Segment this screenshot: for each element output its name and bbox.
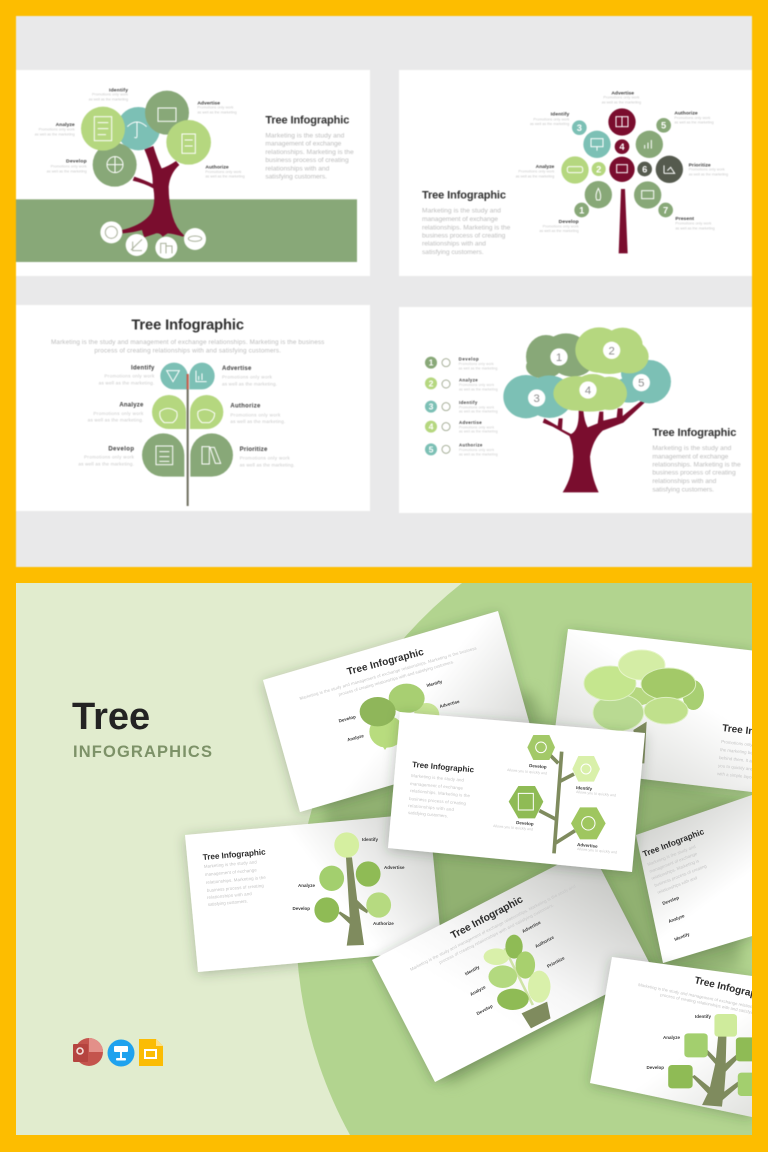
cloud 2 bbox=[575, 327, 649, 374]
mock slide: top centre: Develop bbox=[338, 714, 356, 723]
numbered small circles: 4 bbox=[619, 142, 625, 152]
labels: as well as the marketing. bbox=[230, 419, 285, 424]
labels: Promotions only work bbox=[104, 374, 155, 379]
labels: Promotions only work bbox=[205, 170, 242, 174]
labels: Analyze bbox=[536, 164, 555, 170]
numbered list: Identify bbox=[459, 400, 478, 405]
icon: PowerPoint bbox=[73, 1038, 103, 1066]
labels: Advertise bbox=[611, 90, 634, 96]
labels: as well as the marketing. bbox=[99, 380, 154, 385]
heading: Tree Infographic bbox=[131, 317, 244, 333]
numbered list: Promotions only work bbox=[459, 448, 494, 452]
darker shading under slides bbox=[320, 690, 740, 1085]
labels: Analyze bbox=[56, 122, 75, 128]
stem bbox=[187, 374, 189, 506]
labels: Develop bbox=[66, 159, 87, 165]
numbered list: Authorize bbox=[459, 443, 483, 448]
labels: as well as the marketing bbox=[675, 226, 715, 230]
labels: Prioritize bbox=[689, 163, 711, 169]
numbered list: Promotions only work bbox=[459, 362, 494, 366]
labels: Promotions only work bbox=[543, 224, 579, 228]
tree trunk and roots bbox=[122, 146, 184, 237]
description: satisfying customers. bbox=[265, 174, 327, 181]
mock slide: right bbox=[636, 795, 752, 963]
description bbox=[652, 445, 741, 493]
description: management of exchange bbox=[265, 141, 342, 148]
heading: Tree Infographic bbox=[652, 427, 736, 439]
slide: numbered circle tree bbox=[399, 70, 752, 276]
numbered small circles: 3 bbox=[577, 123, 582, 133]
numbered small circles: 7 bbox=[663, 205, 668, 215]
description: satisfying customers. bbox=[652, 486, 714, 493]
numbered list: Promotions only work bbox=[459, 405, 494, 409]
mock slide: centre hexagon tree: Develop bbox=[529, 763, 547, 770]
description bbox=[51, 339, 324, 354]
labels: Promotions only work bbox=[230, 412, 281, 417]
mock slide: left tree: relationships with and bbox=[207, 891, 252, 900]
mock slide: centre hexagon tree bbox=[388, 712, 645, 872]
description: process of creating relationships with and satisfying customers. bbox=[94, 347, 281, 354]
mock slide: left tree: management of exchange bbox=[205, 867, 257, 877]
tree crown circles bbox=[81, 91, 211, 187]
mock slide: centre hexagon tree: Marketing is the study and bbox=[411, 773, 465, 783]
labels: Promotions only work bbox=[92, 92, 128, 96]
slide: cloud tree bbox=[399, 307, 752, 513]
heading: Tree Infographic bbox=[422, 190, 506, 202]
mock slide: top right bbox=[550, 629, 768, 792]
labels: Promotions only work bbox=[533, 117, 570, 121]
panel: product cover bbox=[16, 583, 768, 1135]
mock slide: bottom right: Develop bbox=[646, 1065, 664, 1070]
labels: as well as the marketing bbox=[530, 122, 569, 126]
numbered badges: 5 bbox=[638, 378, 644, 390]
labels: Promotions only work bbox=[518, 170, 555, 174]
mock slide: centre hexagon tree: Tree Infographic bbox=[412, 760, 475, 774]
mock slide: left tree: Identify bbox=[362, 837, 378, 842]
description: management of exchange bbox=[652, 453, 729, 460]
mock slide: right: Identify bbox=[674, 931, 691, 942]
mock slide: plant in pot bbox=[372, 848, 653, 1082]
slide: tree with roots bbox=[16, 70, 370, 276]
mock slide: bottom right bbox=[590, 957, 768, 1117]
labels: Advertise bbox=[197, 100, 220, 106]
labels: as well as the marketing bbox=[516, 174, 554, 178]
mock slide: centre hexagon tree: Allows you to quickly and bbox=[576, 790, 616, 797]
labels: Authorize bbox=[205, 164, 229, 170]
trunk bbox=[619, 189, 628, 253]
labels: as well as the marketing bbox=[539, 229, 579, 233]
labels: Promotions only work bbox=[51, 164, 87, 168]
mock slide: left tree: relationships. Marketing is the bbox=[206, 875, 266, 885]
cloud 1 bbox=[526, 333, 593, 378]
mock slide: right: Marketing is the study and bbox=[647, 844, 697, 867]
description: relationships with and bbox=[422, 241, 486, 248]
mock slide: plant in pot: Advertise bbox=[521, 920, 542, 934]
cloud 5 bbox=[613, 360, 671, 403]
numbered list: Promotions only work bbox=[459, 425, 494, 429]
mock slide: top centre: Tree Infographic bbox=[346, 647, 426, 678]
labels: Advertise bbox=[222, 366, 252, 372]
numbered badges: 1 bbox=[556, 352, 562, 364]
mock slide: left tree: Marketing is the study and bbox=[204, 859, 257, 869]
stem and branches bbox=[539, 752, 575, 853]
mock slide: right: relationships. Marketing is bbox=[651, 858, 700, 881]
description: satisfying customers. bbox=[422, 249, 484, 256]
panel: slide previews bbox=[16, 16, 752, 567]
description: relationships with and bbox=[652, 478, 717, 485]
numbered small circles: 1 bbox=[579, 205, 584, 215]
description: relationships. Marketing is the bbox=[422, 224, 511, 231]
mock slide: left tree: Authorize bbox=[373, 921, 394, 926]
labels bbox=[35, 87, 245, 179]
mock slide: centre hexagon tree: Allows you to quickly and bbox=[507, 768, 547, 775]
numbered small circles: 5 bbox=[661, 121, 666, 131]
labels: as well as the marketing bbox=[197, 110, 237, 114]
labels: Identify bbox=[109, 87, 128, 93]
numbered badges: 2 bbox=[609, 345, 615, 357]
labels: as well as the marketing bbox=[89, 97, 128, 101]
description: management of exchange bbox=[422, 216, 498, 223]
mock slide: top centre: Identify bbox=[426, 679, 443, 688]
description: business process of creating bbox=[652, 470, 736, 477]
numbered list: as well as the marketing bbox=[459, 366, 497, 370]
description: business process of creating bbox=[422, 232, 506, 239]
ground band bbox=[16, 199, 357, 262]
leaf icons bbox=[156, 371, 221, 465]
mock slide: left tree: Advertise bbox=[384, 865, 405, 870]
mock slide: left tree: Tree Infographic bbox=[202, 847, 266, 862]
description: Marketing is the study and bbox=[422, 208, 501, 215]
mock slide: left tree: satisfying customers. bbox=[208, 899, 248, 907]
numbered list: 3 bbox=[429, 402, 434, 412]
labels: Promotions only work bbox=[93, 411, 144, 416]
labels: as well as the marketing bbox=[205, 175, 245, 179]
cloud 3 bbox=[503, 375, 573, 418]
mock slide: plant in pot: Prioritize bbox=[546, 955, 566, 969]
description: relationships. Marketing is the bbox=[652, 462, 741, 469]
subtitle: INFOGRAPHICS bbox=[73, 743, 212, 761]
labels: as well as the marketing. bbox=[88, 418, 143, 423]
numbered list: as well as the marketing bbox=[459, 410, 498, 414]
numbered list: Promotions only work bbox=[459, 383, 494, 387]
numbered list: as well as the marketing bbox=[459, 387, 498, 391]
icon: Keynote bbox=[108, 1040, 134, 1066]
mock slide: centre hexagon tree: Advertise bbox=[577, 842, 598, 849]
labels: Promotions only work bbox=[689, 168, 725, 172]
labels: Promotions only work bbox=[240, 456, 290, 461]
mock slide: right: Tree Infographic bbox=[641, 826, 706, 859]
mock slide: right: business process of creating bbox=[654, 863, 708, 888]
heading: Tree Infographic bbox=[265, 114, 349, 126]
labels: Promotions only work bbox=[39, 128, 75, 132]
mock slide: plant in pot: Authorize bbox=[534, 934, 555, 949]
mock slide: centre hexagon tree: business process of creating bbox=[409, 796, 467, 806]
labels: as well as the marketing bbox=[602, 100, 641, 104]
numbered list: Advertise bbox=[459, 420, 482, 425]
numbered list: 2 bbox=[429, 378, 434, 388]
numbered list: 4 bbox=[429, 422, 434, 432]
mock slide: centre hexagon tree: Develop bbox=[516, 820, 534, 827]
mock slide: plant in pot: Analyze bbox=[469, 984, 487, 997]
numbered badges bbox=[528, 342, 650, 407]
mock slide: centre hexagon tree: satisfying customers. bbox=[408, 810, 448, 818]
mock slide: top centre: Marketing is the study and management of exchange relationships. Marketing is the business bbox=[299, 645, 477, 701]
numbered list: Develop bbox=[459, 356, 479, 361]
mock slide: bottom right: Marketing is the study and management of exchange relationships bbox=[638, 982, 763, 1011]
mock slide: top centre bbox=[263, 611, 535, 812]
numbered badges: 4 bbox=[585, 385, 591, 397]
large icon circles bbox=[561, 108, 683, 209]
description: business process of creating bbox=[265, 157, 349, 164]
mock slide: top centre: process of creating relationships with and satisfying customers. bbox=[338, 659, 455, 697]
labels: Authorize bbox=[230, 404, 261, 410]
labels: as well as the marketing. bbox=[78, 462, 134, 467]
labels: Prioritize bbox=[240, 447, 268, 453]
numbered list: Analyze bbox=[459, 378, 478, 383]
mock slide: centre hexagon tree: relationships with and bbox=[408, 803, 455, 812]
labels: Identify bbox=[551, 112, 570, 118]
mock slide: top right: you to quickly and easily bbox=[718, 763, 767, 773]
mock slide: left tree bbox=[185, 813, 442, 972]
mock slide: right: relationships with and bbox=[657, 875, 698, 895]
labels: Promotions only work bbox=[222, 375, 273, 380]
mock slide: bottom right: Identify bbox=[695, 1014, 711, 1019]
mock slide: centre hexagon tree: Identify bbox=[576, 785, 593, 791]
description: Marketing is the study and bbox=[652, 445, 732, 452]
mock slide: plant in pot: process of creating relationships with and satisfying customers. bbox=[438, 902, 555, 965]
numbered list: 1 bbox=[429, 358, 434, 368]
description bbox=[422, 208, 511, 256]
mock slide: left tree: business process of creating bbox=[207, 883, 264, 893]
description: relationships with and bbox=[265, 165, 330, 172]
mock slide: top right: behind them. It allows bbox=[719, 755, 762, 765]
numbered list: as well as the marketing bbox=[459, 430, 498, 434]
leaves bbox=[142, 363, 233, 477]
labels bbox=[516, 90, 728, 233]
slide: leaf pairs on stem bbox=[16, 305, 370, 511]
mock slide: right: management of exchange bbox=[649, 851, 698, 874]
icon: Google Slides bbox=[139, 1039, 163, 1066]
labels: as well as the marketing. bbox=[240, 463, 295, 468]
mock slide: left tree: Analyze bbox=[298, 883, 315, 888]
labels: as well as the marketing bbox=[35, 132, 75, 136]
labels: as well as the marketing bbox=[689, 172, 728, 176]
large green circle background bbox=[296, 583, 752, 1135]
labels: Authorize bbox=[674, 111, 698, 117]
labels: Promotions only work bbox=[197, 106, 234, 110]
mock slide: right: Analyze bbox=[668, 913, 686, 924]
description: Marketing is the study and bbox=[265, 132, 345, 139]
description: Marketing is the study and management of exchange relationships. Marketing is the business bbox=[51, 339, 324, 346]
trunk bbox=[543, 401, 645, 492]
labels: as well as the marketing bbox=[674, 121, 714, 125]
labels: Develop bbox=[108, 446, 134, 452]
mock slide: centre hexagon tree: relationships. Marketing is the bbox=[410, 788, 471, 798]
numbered small circles: 2 bbox=[596, 164, 601, 174]
numbered small circles bbox=[572, 118, 673, 217]
mock slide: plant in pot: Marketing is the study and management of exchange relationships. Marketing is the study and bbox=[409, 883, 577, 972]
mock slide: top centre: Analyze bbox=[347, 733, 365, 742]
labels: Present bbox=[675, 216, 694, 222]
numbered list: as well as the marketing bbox=[459, 452, 498, 456]
mock slide: left tree: Develop bbox=[292, 906, 310, 911]
mock slide: top centre: Advertise bbox=[439, 699, 461, 709]
numbered list bbox=[425, 356, 498, 456]
mock slide: bottom right: process of creating relationships with and satisfying bbox=[660, 992, 757, 1016]
mock slide: bottom right: Analyze bbox=[663, 1035, 680, 1040]
mock slide: centre hexagon tree: Allows you to quickly and bbox=[577, 847, 617, 854]
numbered small circles: 6 bbox=[642, 164, 647, 174]
labels bbox=[78, 365, 295, 468]
numbered badges: 3 bbox=[534, 393, 540, 405]
main title: Tree bbox=[72, 696, 150, 738]
description: relationships. Marketing is the bbox=[265, 149, 354, 156]
labels: Promotions only work bbox=[603, 95, 640, 99]
labels: as well as the marketing bbox=[47, 169, 87, 173]
hexagons bbox=[527, 735, 555, 760]
labels: as well as the marketing. bbox=[222, 381, 277, 386]
mock slide: plant in pot: Tree Infographic bbox=[449, 894, 525, 942]
mock slide: plant in pot: Identify bbox=[464, 964, 481, 976]
cloud 4 bbox=[553, 374, 627, 412]
root icon circles bbox=[100, 221, 206, 259]
mock slide: centre hexagon tree: management of exchange bbox=[410, 781, 464, 791]
labels: Develop bbox=[559, 219, 579, 225]
labels: Analyze bbox=[119, 403, 144, 409]
numbered list: 5 bbox=[429, 444, 434, 454]
labels: Promotions only work bbox=[84, 455, 135, 460]
labels: Promotions only work bbox=[675, 222, 712, 226]
description bbox=[265, 132, 354, 181]
mock slide: right: Develop bbox=[662, 895, 680, 906]
labels: Identify bbox=[131, 365, 155, 371]
labels: Promotions only work bbox=[674, 116, 711, 120]
mock slide: centre hexagon tree: Allows you to quickly and bbox=[493, 824, 533, 831]
mock slide: plant in pot: Develop bbox=[476, 1003, 494, 1016]
mock slide: top right: with a simple layout bbox=[717, 771, 756, 780]
